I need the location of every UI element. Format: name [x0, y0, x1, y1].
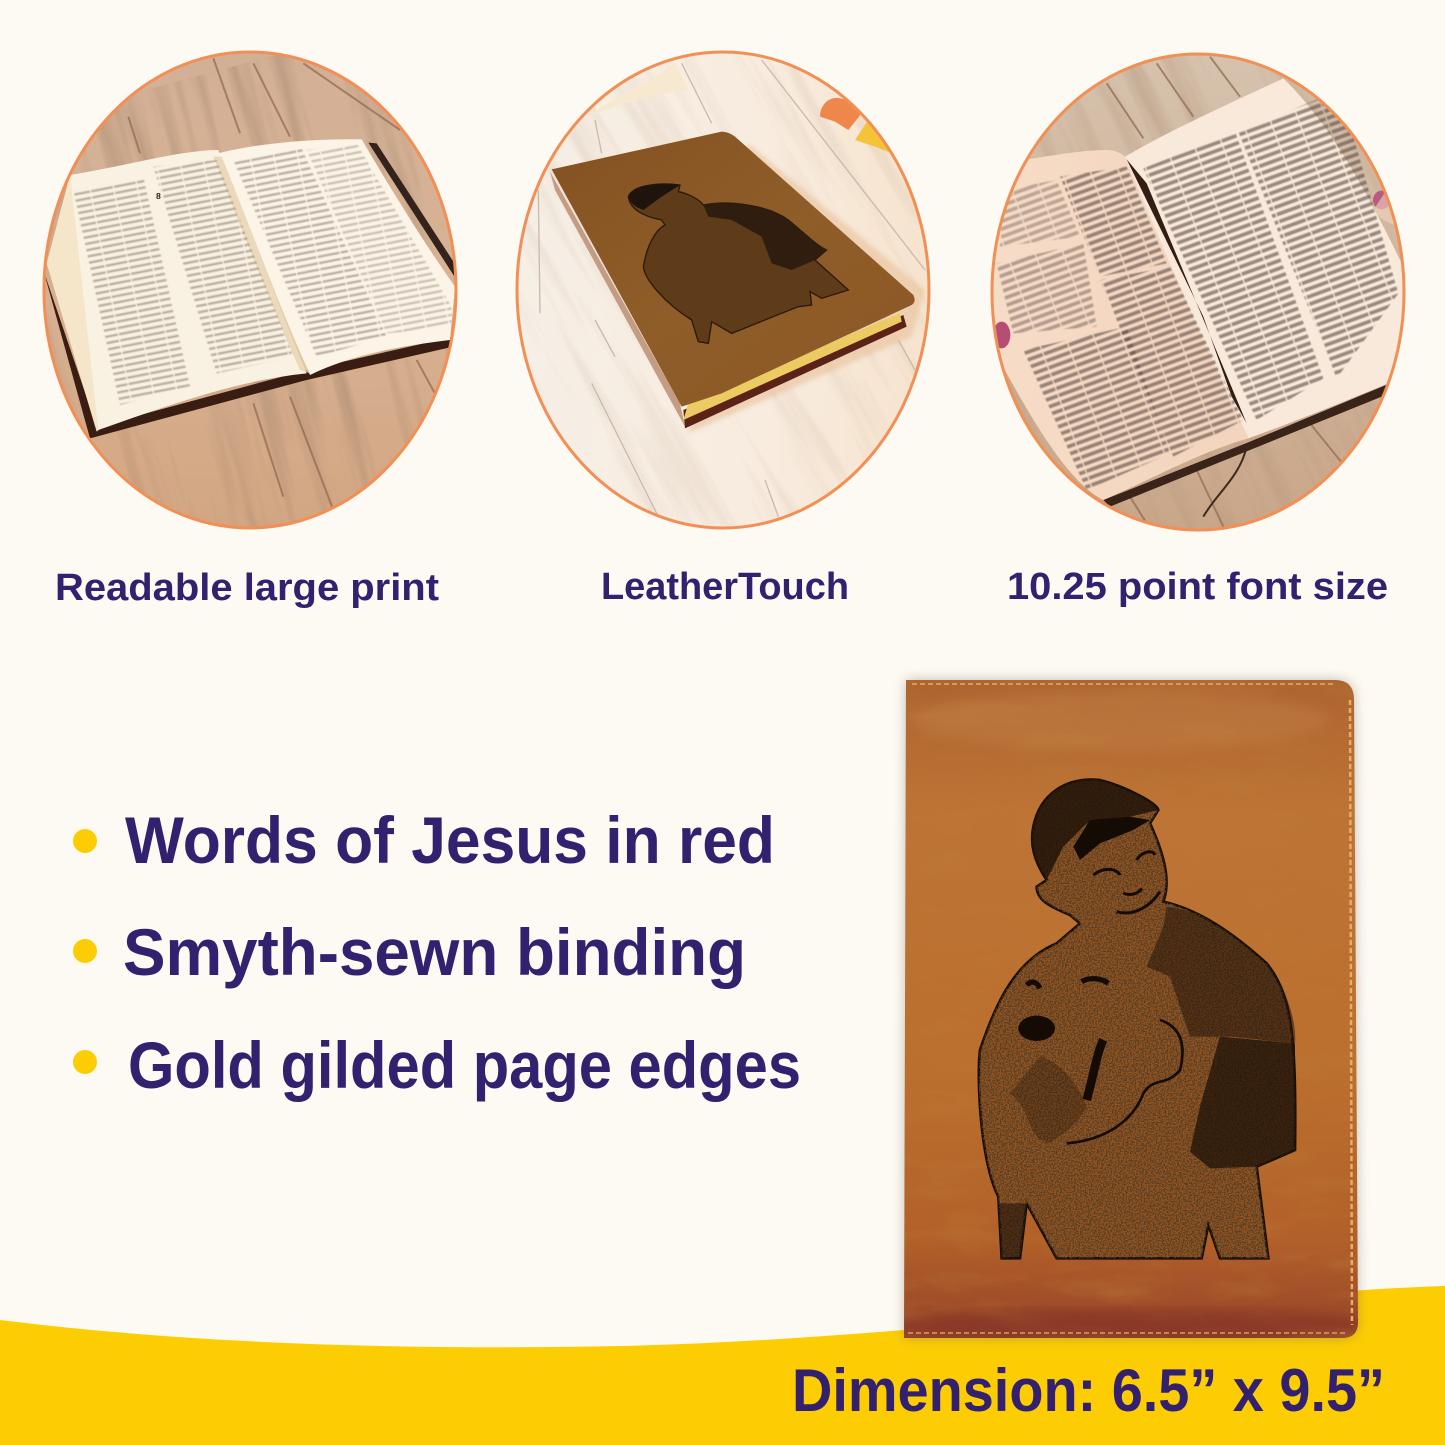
decoration: burlap cloth: [588, 63, 688, 117]
boy hair: [1073, 817, 1150, 860]
page text columns: [997, 90, 1398, 490]
dog nose: [1018, 1016, 1055, 1041]
dog head outline: [1067, 1020, 1182, 1143]
bullet 1: [73, 829, 97, 853]
boy cap: [1032, 780, 1158, 880]
circle outline: [517, 52, 929, 528]
caption: readable large print: Readable large print: [55, 567, 439, 609]
dog legs dark: [1000, 1203, 1027, 1258]
dog ear: [1010, 1057, 1087, 1143]
page text columns: [73, 143, 452, 405]
circle outline: [992, 54, 1404, 530]
bullet 3: [73, 1050, 97, 1074]
speckled engraving tone: [979, 780, 1295, 1258]
leather Bible cover with engraved portrait: [890, 675, 1370, 1345]
circle outline: [44, 52, 456, 528]
bullet 2: [73, 939, 97, 963]
feature: page edges: Gold gilded page edges: [128, 1028, 801, 1102]
dimension label: Dimension: 6.5” x 9.5”: [792, 1357, 1385, 1424]
boy shorts: [1190, 1037, 1295, 1168]
page stack: [46, 177, 100, 432]
boy smile and eyes: [1093, 852, 1160, 913]
gilded pages: [683, 313, 902, 420]
figure base silhouette: [979, 780, 1295, 1258]
fingers: [996, 322, 1010, 348]
gutter: [1127, 159, 1247, 423]
engraved figure: [628, 184, 848, 343]
boy shirt: [1147, 907, 1295, 1043]
left page: [70, 150, 307, 430]
bookmark ribbon: [1203, 447, 1247, 517]
decoration: orange flower: [820, 98, 862, 130]
leather cover: [552, 132, 915, 407]
feature list: [73, 803, 801, 1102]
right page: [218, 139, 455, 375]
feature: binding: Smyth-sewn binding: [123, 915, 746, 989]
feature: words of Jesus: Words of Jesus in red: [125, 803, 775, 877]
verse numerals: 8: [156, 191, 161, 201]
engraved portrait: boy and dog: [979, 780, 1295, 1258]
photo: open Bible on wood table: [42, 50, 458, 530]
dog mouth: [1087, 1040, 1103, 1100]
left page: [990, 150, 1248, 500]
underside: [683, 315, 907, 428]
caption: font size: 10.25 point font size: [1007, 566, 1388, 608]
book board: [1103, 383, 1390, 507]
photo: open Bible close-up: [990, 52, 1406, 532]
gutter shading: [213, 157, 310, 373]
book shadow and board: [43, 270, 453, 438]
book spine side: [550, 172, 685, 427]
photo: closed leather Bible on wood: [516, 50, 930, 530]
yellow wave footer band: [0, 1286, 1445, 1445]
shadow under book: [688, 143, 925, 433]
dog eyes: [1027, 979, 1108, 988]
right page: [1125, 78, 1403, 438]
caption: LeatherTouch: LeatherTouch: [601, 566, 849, 608]
